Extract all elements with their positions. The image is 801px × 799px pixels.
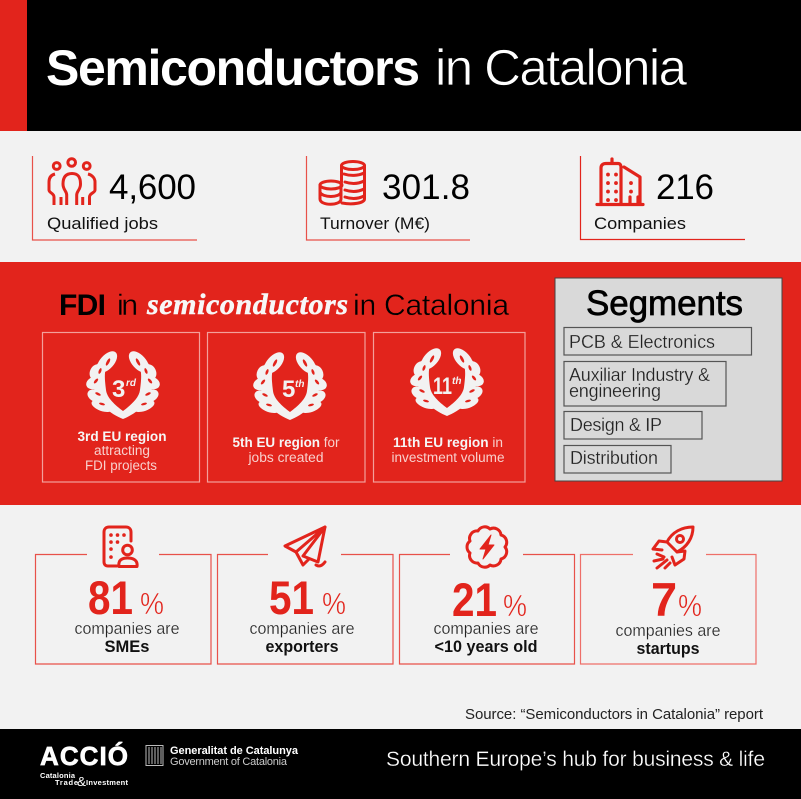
heading: FDI in semiconductors in Catalonia: semiconductors [146,288,348,321]
source note: Source: “Semiconductors in Catalonia” report [465,706,764,723]
icon: laurel 5th: th [295,379,304,390]
icon: laurel 11th [408,345,486,416]
card: 5th EU region [208,332,365,482]
card: 5th EU region: 5th EU region for [232,435,340,450]
logo: ACCIÓ: Catalonia [40,771,76,780]
stat: qualified jobs: Qualified jobs [47,215,158,233]
card: startups: companies are [616,622,720,640]
icon: laurel 3rd: rd [126,378,137,389]
icon: buildings [597,159,643,204]
heading: FDI in semiconductors in Catalonia: FDI [59,289,106,322]
logo: ACCIÓ: & [77,774,86,789]
card: exporters: % [322,586,346,621]
card: young companies: % [503,588,527,623]
icon: rocket [653,527,693,568]
card: startups: 7 [651,573,677,626]
logo: ACCIÓ [40,741,128,789]
title: Semiconductors [46,40,420,96]
stat: turnover: 301.8 [382,168,470,207]
stat: companies: 216 [656,168,714,207]
icon: laurel 5th: 5 [282,376,295,403]
card: exporters [218,527,393,664]
logo: Generalitat de Catalunya [146,745,299,768]
segment: PCB and electronics: PCB & Electronics [569,332,715,352]
heading: FDI in semiconductors in Catalonia [59,288,509,322]
header banner [0,0,801,131]
card: young companies [400,527,574,664]
card: exporters: exporters [266,638,338,656]
icon: brain with bolt [467,527,507,567]
icon: coins [320,162,364,204]
card: 11th EU region: 11th EU region in [393,435,503,450]
card: young companies: 21 [452,573,497,626]
icon: laurel 11th: th [452,376,461,387]
icon: laurel 3rd: 3 [112,376,125,403]
heading: FDI in semiconductors in Catalonia: in [117,289,138,322]
card: 3rd EU region: attracting [94,443,150,458]
stat: turnover: Turnover (M€) [320,215,430,233]
stat: qualified jobs [32,156,197,240]
card: startups: startups [636,640,700,658]
card: SMEs: SMEs [104,638,150,656]
logo: ACCIÓ: Investment [86,778,128,787]
card: startups: % [678,588,702,623]
segment: auxiliar industry and engineering: Auxiliar Industry & [569,365,710,385]
card: startups [580,527,756,664]
segment: distribution: Distribution [570,448,658,468]
title: in Catalonia [435,39,688,96]
icon: building with person [104,527,137,566]
card: SMEs: companies are [74,620,180,638]
heading: FDI in semiconductors in Catalonia: in Catalonia [353,289,509,322]
icon: coat of arms [146,746,163,766]
panel: FDI in semiconductors [0,262,801,799]
stat: qualified jobs: 4,600 [109,168,196,207]
stat: turnover [306,156,470,240]
icon: paper plane [285,527,325,566]
card: young companies: <10 years old [434,638,538,656]
segment: auxiliar industry and engineering: engineering [569,381,661,401]
stat: companies: Companies [594,215,686,233]
logo: Generalitat de Catalunya: Government of Catalonia [170,756,288,768]
icon: laurel 11th: 11 [433,373,452,400]
card: SMEs [36,527,211,664]
segment: auxiliar industry and engineering [564,362,726,406]
stat: companies [580,156,745,240]
icon: people [49,159,95,205]
logo: ACCIÓ: Trade [55,778,78,787]
icon: laurel 3rd [84,348,162,419]
panel: segments [555,278,782,481]
segment: design and IP: Design & IP [570,415,662,435]
title [46,39,688,96]
card: SMEs: % [140,586,164,621]
card: exporters: 51 [269,571,314,624]
tagline: Southern Europe’s hub for business & life [386,748,765,771]
card: 3rd EU region: FDI projects [85,458,157,473]
card: young companies: companies are [434,620,538,638]
card: SMEs: 81 [88,571,133,624]
card: 5th EU region: jobs created [247,450,324,465]
segment: design and IP [564,412,702,439]
heading: segments: Segments [586,284,743,323]
segment: PCB and electronics [564,328,752,355]
icon: laurel 5th [251,349,329,420]
card: 11th EU region [374,332,525,482]
card: exporters: companies are [250,620,354,638]
logo: Generalitat de Catalunya: Generalitat de Catalunya [170,745,299,757]
card: 3rd EU region [42,332,200,482]
logo: ACCIÓ: ACCIÓ [40,741,128,771]
footer [0,729,801,799]
segment: distribution [564,446,671,473]
card: 11th EU region: investment volume [392,450,504,465]
card: 3rd EU region: 3rd EU region [78,429,166,444]
